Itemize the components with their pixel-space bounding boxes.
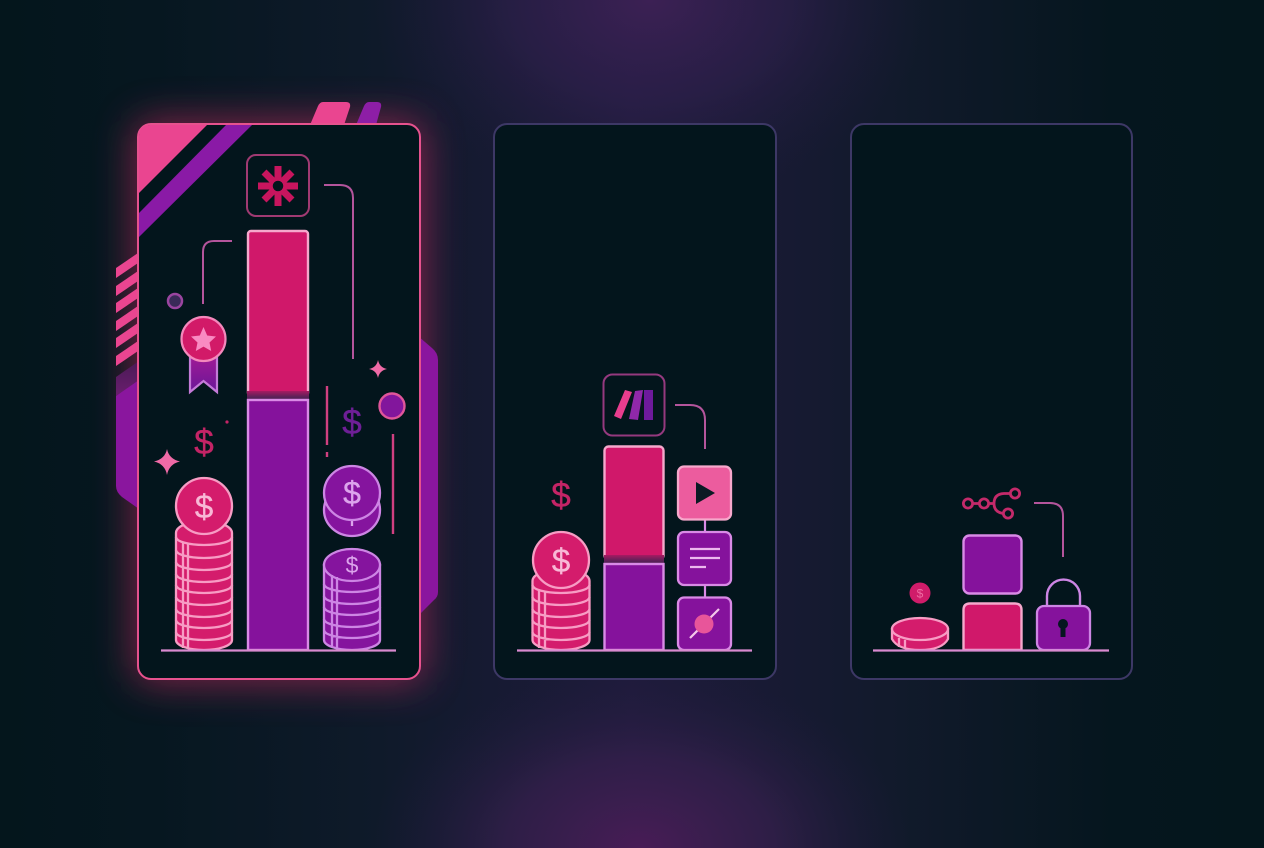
icon: branching nodes [963, 489, 1020, 518]
floating dollar signs: $ [342, 403, 362, 442]
floating dollar sign: $ [551, 476, 571, 515]
accent marks [327, 386, 393, 534]
icon: padlock [1037, 580, 1090, 650]
corner banner [139, 125, 252, 237]
purple double coin: $ [343, 475, 361, 511]
top tabs [310, 102, 381, 125]
flat coin [892, 618, 948, 650]
panel glow [134, 120, 424, 683]
purple coin stack [324, 549, 380, 650]
floating dollar signs [194, 403, 362, 462]
panel body [494, 124, 776, 679]
sparkles [154, 360, 387, 475]
icon: make logo badge [604, 374, 664, 436]
icon: ribbon medal [182, 317, 226, 392]
panel: middle [494, 124, 776, 679]
panel: left highlighted [116, 102, 438, 683]
document box [678, 532, 731, 585]
panel body [138, 124, 420, 679]
baseline [517, 649, 752, 652]
baseline [873, 649, 1109, 652]
small circle [168, 294, 182, 308]
pink coin stack: $ [552, 542, 570, 579]
connector lines [203, 185, 353, 359]
left hazard stripes [116, 253, 138, 366]
connector line [675, 405, 705, 449]
pink top coin [176, 478, 232, 534]
purple coin stack: $ [346, 552, 359, 578]
small dollar coin [910, 582, 930, 604]
node box [678, 598, 731, 650]
icon: asterisk badge [247, 155, 309, 216]
pink coin stack [176, 478, 232, 650]
panel: right [851, 124, 1132, 679]
stacked blocks [964, 536, 1022, 650]
pink coin stack [532, 532, 590, 650]
decorative purple backplate [116, 336, 438, 616]
purple double coin [324, 466, 380, 536]
baseline [161, 649, 396, 652]
workflow connectors [704, 519, 706, 597]
small dollar coin: $ [917, 586, 924, 600]
pink coin stack: $ [195, 488, 213, 525]
accent circle [380, 394, 404, 418]
panel body [851, 124, 1132, 679]
play box [678, 466, 731, 520]
connector line [1034, 503, 1063, 557]
stacked bar [604, 446, 664, 650]
main stacked bar [247, 231, 309, 650]
floating dollar signs: $ [194, 423, 214, 462]
